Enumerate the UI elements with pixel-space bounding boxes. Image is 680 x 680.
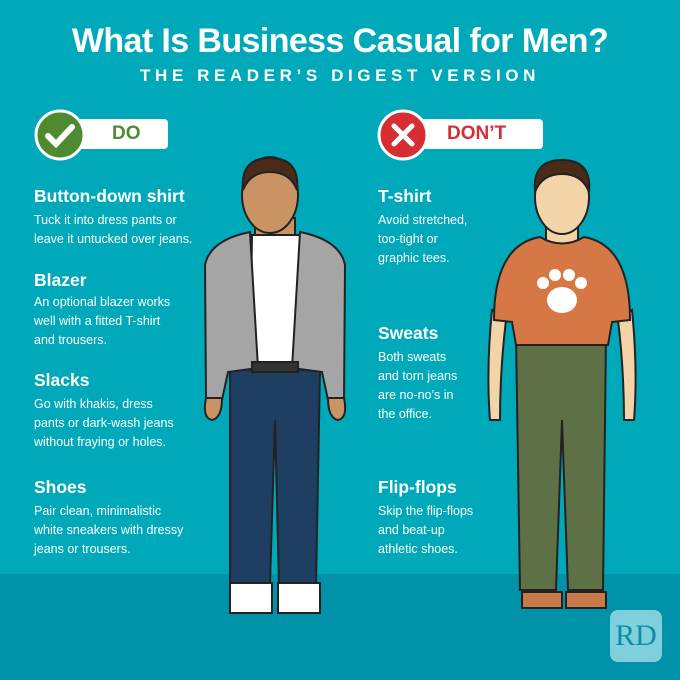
text: flip-flops: Skip the flip-flops (378, 504, 473, 518)
text: button-down shirt: Button-down shirt (34, 186, 185, 206)
badge: do (34, 110, 168, 160)
text: button-down shirt (34, 186, 192, 246)
text: blazer: An optional blazer works (34, 295, 170, 309)
text: t-shirt: too-tight or (378, 232, 438, 246)
text: button-down shirt: Tuck it into dress pants or (34, 213, 177, 227)
text: blazer (34, 270, 170, 347)
text: slacks: Slacks (34, 370, 89, 390)
text: sweats: are no-no’s in (378, 388, 454, 402)
text: flip-flops: Flip-flops (378, 477, 457, 497)
badge: don't (378, 110, 543, 160)
text: blazer: and trousers. (34, 333, 107, 347)
text: slacks: without fraying or holes. (34, 435, 166, 449)
subtitle: THE READER’S DIGEST VERSION (140, 66, 540, 85)
logo: RD (610, 610, 662, 662)
text: flip-flops: athletic shoes. (378, 542, 458, 556)
text: sweats: Sweats (378, 323, 438, 343)
text: button-down shirt: leave it untucked over jeans. (34, 232, 192, 246)
text: flip-flops: and beat-up (378, 523, 445, 537)
badge: do: DO (112, 123, 140, 144)
figure: casual man (487, 159, 637, 609)
text: flip-flops (378, 477, 473, 556)
logo: RD: RD (615, 619, 657, 652)
text: t-shirt: T-shirt (378, 186, 431, 206)
text: sweats: Both sweats (378, 350, 446, 364)
text: sweats: and torn jeans (378, 369, 457, 383)
text: t-shirt (378, 186, 467, 265)
text: shoes: Shoes (34, 477, 87, 497)
text: shoes (34, 477, 184, 556)
text: shoes: white sneakers with dressy (34, 523, 183, 537)
text: slacks: pants or dark-wash jeans (34, 416, 174, 430)
text: shoes: Pair clean, minimalistic (34, 504, 161, 518)
text: blazer: well with a fitted T-shirt (34, 314, 160, 328)
text: sweats (378, 323, 457, 421)
title: What Is Business Casual for Men? (72, 22, 608, 60)
text: shoes: jeans or trousers. (34, 542, 131, 556)
text: slacks (34, 370, 174, 449)
text: sweats: the office. (378, 407, 432, 421)
text: t-shirt: graphic tees. (378, 251, 450, 265)
text: slacks: Go with khakis, dress (34, 397, 153, 411)
text: blazer: Blazer (34, 270, 87, 290)
badge: don't: DON’T (447, 123, 506, 144)
figure: business casual man (204, 156, 346, 614)
text: t-shirt: Avoid stretched, (378, 213, 467, 227)
